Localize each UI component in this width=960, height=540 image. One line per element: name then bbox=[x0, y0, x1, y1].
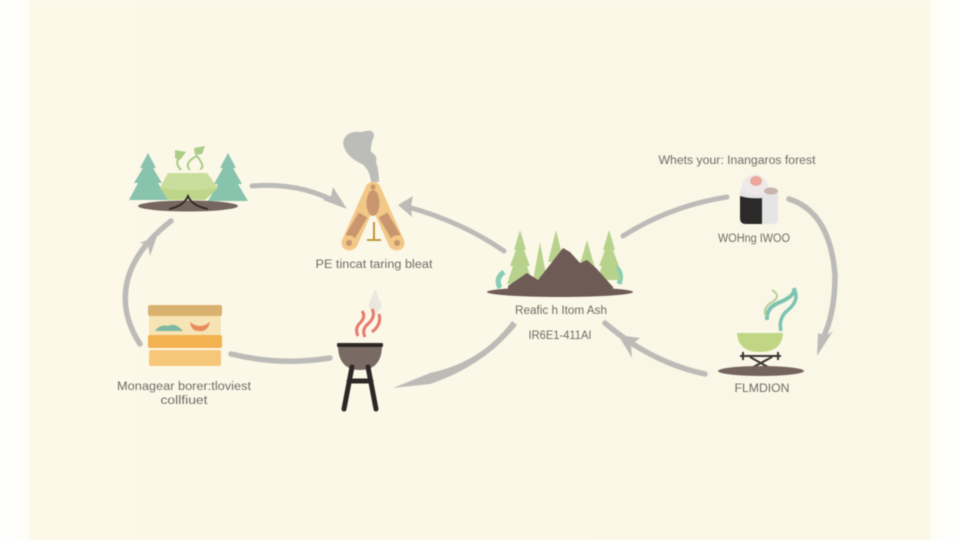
label: tipi: PE tincat taring bleat bbox=[316, 259, 433, 271]
icon: mountain with forest bbox=[487, 230, 633, 297]
label: mountain code: IR6E1-411AI bbox=[528, 330, 592, 342]
arrow: grill to box bbox=[231, 354, 330, 361]
icon: smoking tipi bbox=[342, 131, 404, 250]
arrow: pot to bowl bbox=[789, 199, 835, 356]
label: box bbox=[117, 381, 252, 407]
icon: steaming bowl bbox=[718, 288, 804, 376]
arrow: bowl to mountain bbox=[605, 323, 705, 374]
icon: pot bbox=[740, 174, 778, 224]
label: mountain title: Reafic h Itom Ash bbox=[515, 305, 607, 317]
icon: layered box bbox=[148, 305, 222, 366]
icon: tent with trees bbox=[129, 146, 248, 212]
heading: forest question: Whets your: Inangaros forest bbox=[658, 155, 816, 167]
label: box: Monagear borer:tloviest bbox=[117, 381, 252, 393]
label: pot: WOHng IWOO bbox=[718, 233, 790, 245]
arrow: box to tent bbox=[125, 221, 171, 344]
label: box: collfiuet bbox=[160, 395, 208, 407]
arrow: pot to mountain bbox=[623, 197, 727, 236]
arrow: tent to tipi bbox=[252, 185, 347, 209]
label: bowl: FLMDION bbox=[734, 383, 790, 395]
arrow: mountain to grill bbox=[393, 321, 517, 388]
icon: grill bbox=[337, 289, 383, 409]
arrow: mountain to tipi bbox=[398, 196, 504, 251]
